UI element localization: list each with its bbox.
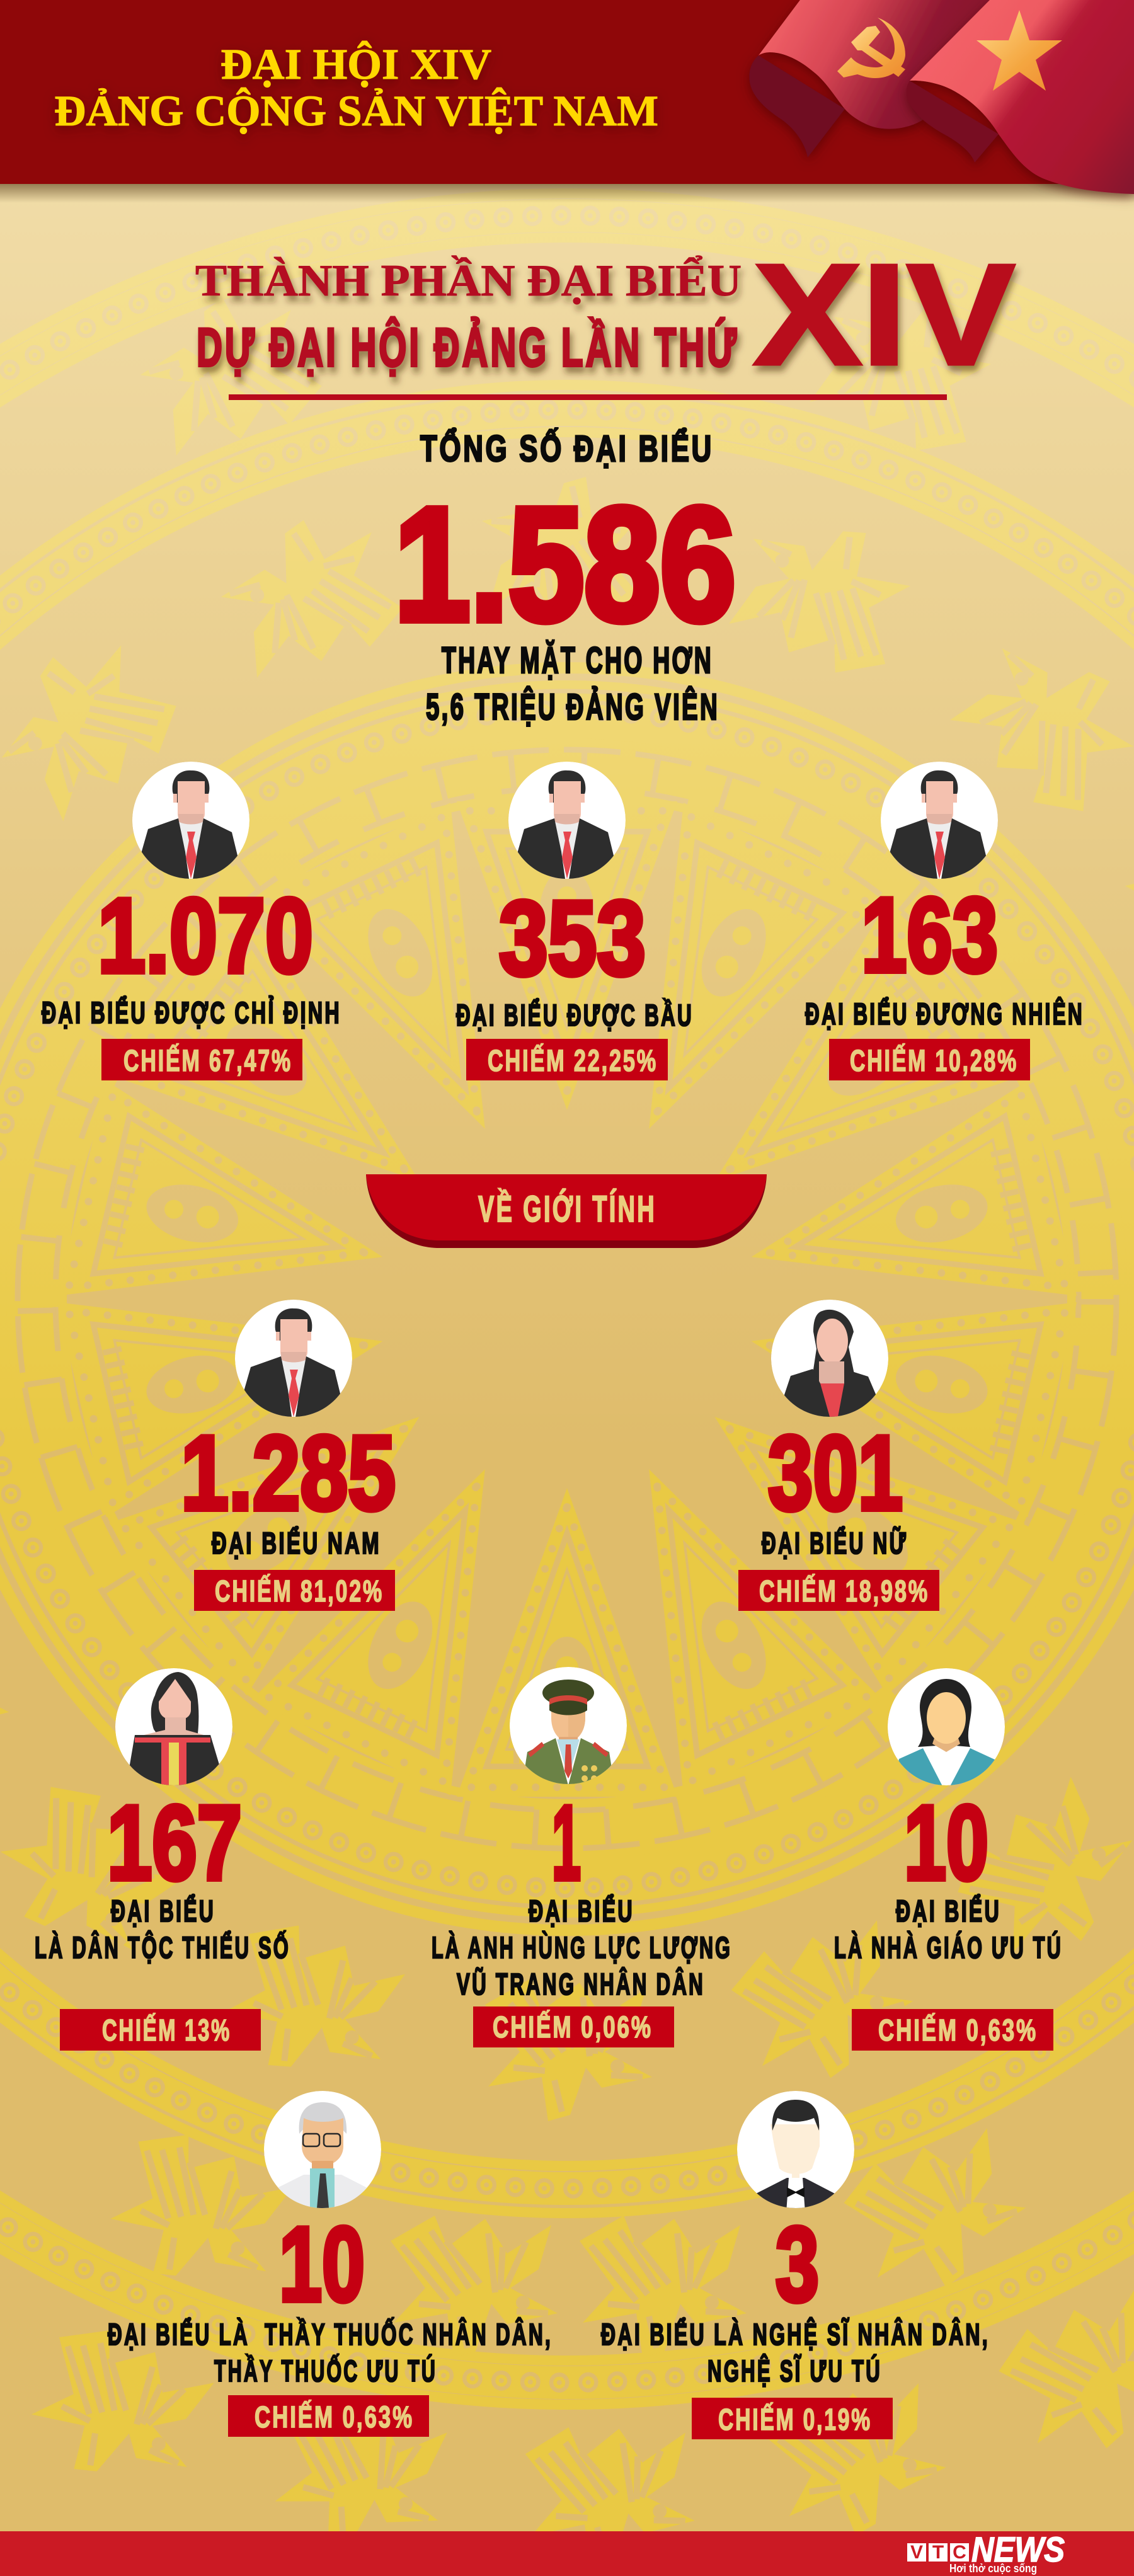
stat: female delegates: ĐẠI BIỂU NỮ — [762, 1526, 908, 1560]
stat: distinguished artists: CHIẾM 0,19% — [718, 2403, 872, 2437]
stat: ex-officio delegates: CHIẾM 10,28% — [850, 1044, 1018, 1078]
total delegates: 1.586 — [394, 474, 736, 655]
stat: elected delegates: ĐẠI BIỂU ĐƯỢC BẦU — [456, 999, 694, 1033]
stat: ethnic minority delegates — [35, 1668, 290, 2051]
header title — [54, 40, 658, 135]
stat: armed forces heroes: ĐẠI BIỂU — [529, 1894, 634, 1928]
icon: man — [132, 762, 249, 883]
icon: doctor — [264, 2091, 381, 2212]
header title: ĐẠI HỘI XIV — [220, 40, 491, 88]
stat: elected delegates — [456, 762, 694, 1080]
logo: VTC News: NEWS — [971, 2529, 1065, 2569]
stat: distinguished artists — [601, 2091, 990, 2439]
icon: teacher — [888, 1668, 1005, 1790]
stat: ethnic minority delegates: CHIẾM 13% — [102, 2013, 231, 2047]
stat: distinguished teachers: CHIẾM 0,63% — [878, 2013, 1038, 2047]
stat: armed forces heroes — [432, 1667, 732, 2047]
logo: VTC News: T — [932, 2542, 944, 2563]
main title — [195, 235, 1015, 395]
stat: elected delegates: 353 — [499, 879, 646, 997]
header shadow — [0, 184, 1134, 203]
icon: man — [235, 1300, 352, 1421]
flag: party flag with hammer and sickle — [749, 0, 990, 157]
header band — [0, 0, 1134, 184]
main title: DỰ ĐẠI HỘI ĐẢNG LẦN THỨ — [197, 318, 739, 378]
stat: male delegates — [181, 1300, 396, 1611]
stat: distinguished doctors: 10 — [279, 2205, 365, 2323]
icon: woman — [771, 1300, 899, 1421]
stat: distinguished doctors: ĐẠI BIỂU LÀ THẦY THUỐC NHÂN DÂN, — [108, 2317, 553, 2352]
icon: star — [976, 10, 1062, 91]
main title: XIV — [753, 235, 1015, 395]
icon: man — [508, 762, 626, 883]
logo: VTC News: Hơi thở cuộc sống — [949, 2562, 1037, 2575]
stat: distinguished artists: 3 — [776, 2205, 819, 2323]
header title: ĐẢNG CỘNG SẢN VIỆT NAM — [54, 87, 658, 135]
stat: ethnic minority delegates: ĐẠI BIỂU — [111, 1894, 215, 1928]
stat: male delegates: 1.285 — [181, 1414, 396, 1532]
total delegates: THAY MẶT CHO HƠN — [442, 640, 713, 681]
total delegates: 5,6 TRIỆU ĐẢNG VIÊN — [426, 687, 719, 728]
footer band — [0, 2531, 1134, 2576]
logo: VTC News: C — [953, 2542, 966, 2563]
stat: distinguished teachers — [834, 1668, 1063, 2051]
stat: elected delegates: CHIẾM 22,25% — [488, 1044, 658, 1078]
stat: distinguished doctors: CHIẾM 0,63% — [255, 2400, 414, 2434]
stat: armed forces heroes: LÀ ANH HÙNG LỰC LƯỢNG — [432, 1930, 732, 1965]
stat: female delegates: CHIẾM 18,98% — [759, 1574, 929, 1608]
stat: appointed delegates: CHIẾM 67,47% — [123, 1044, 292, 1078]
main title: THÀNH PHẦN ĐẠI BIỂU — [195, 255, 742, 306]
background tint overlay — [0, 184, 1134, 1450]
stat: appointed delegates: ĐẠI BIỂU ĐƯỢC CHỈ ĐỊNH — [42, 995, 341, 1030]
stat: appointed delegates: 1.070 — [98, 876, 313, 995]
icon: man — [881, 762, 998, 883]
stat: ethnic minority delegates: 167 — [107, 1783, 242, 1902]
stat: male delegates: CHIẾM 81,02% — [215, 1574, 384, 1608]
stat: armed forces heroes: 1 — [552, 1783, 581, 1902]
stat: armed forces heroes: VŨ TRANG NHÂN DÂN — [457, 1967, 705, 2001]
stat: male delegates: ĐẠI BIỂU NAM — [212, 1526, 381, 1560]
stat: armed forces heroes: CHIẾM 0,06% — [493, 2010, 653, 2044]
stat: female delegates: 301 — [768, 1414, 903, 1532]
logo: VTC News — [907, 2529, 1065, 2575]
stat: appointed delegates — [42, 762, 341, 1080]
stat: distinguished doctors: THẦY THUỐC ƯU TÚ — [214, 2354, 437, 2388]
stat: female delegates — [738, 1300, 939, 1611]
stat: distinguished teachers: 10 — [904, 1783, 988, 1902]
banner: about gender — [366, 1174, 767, 1248]
icon: soldier — [510, 1667, 627, 1789]
stat: ex-officio delegates — [805, 762, 1084, 1080]
stat: distinguished doctors — [108, 2091, 553, 2437]
total delegates: TỔNG SỐ ĐẠI BIỂU — [420, 428, 714, 469]
flag: national flag with star — [907, 0, 1134, 194]
icon: hammer and sickle — [837, 18, 905, 78]
icon: ethnic minority woman — [115, 1668, 232, 1790]
stat: ethnic minority delegates: LÀ DÂN TỘC THIỂU SỐ — [35, 1930, 290, 1965]
total delegates — [394, 428, 736, 728]
stat: distinguished artists: NGHỆ SĨ ƯU TÚ — [707, 2354, 882, 2388]
banner: about gender: VỀ GIỚI TÍNH — [478, 1189, 656, 1230]
stat: ex-officio delegates: 163 — [861, 876, 998, 994]
title underline — [229, 394, 947, 400]
logo: VTC News: V — [910, 2542, 923, 2563]
icon: artist — [737, 2091, 854, 2212]
stat: distinguished teachers: ĐẠI BIỂU — [896, 1894, 1001, 1928]
